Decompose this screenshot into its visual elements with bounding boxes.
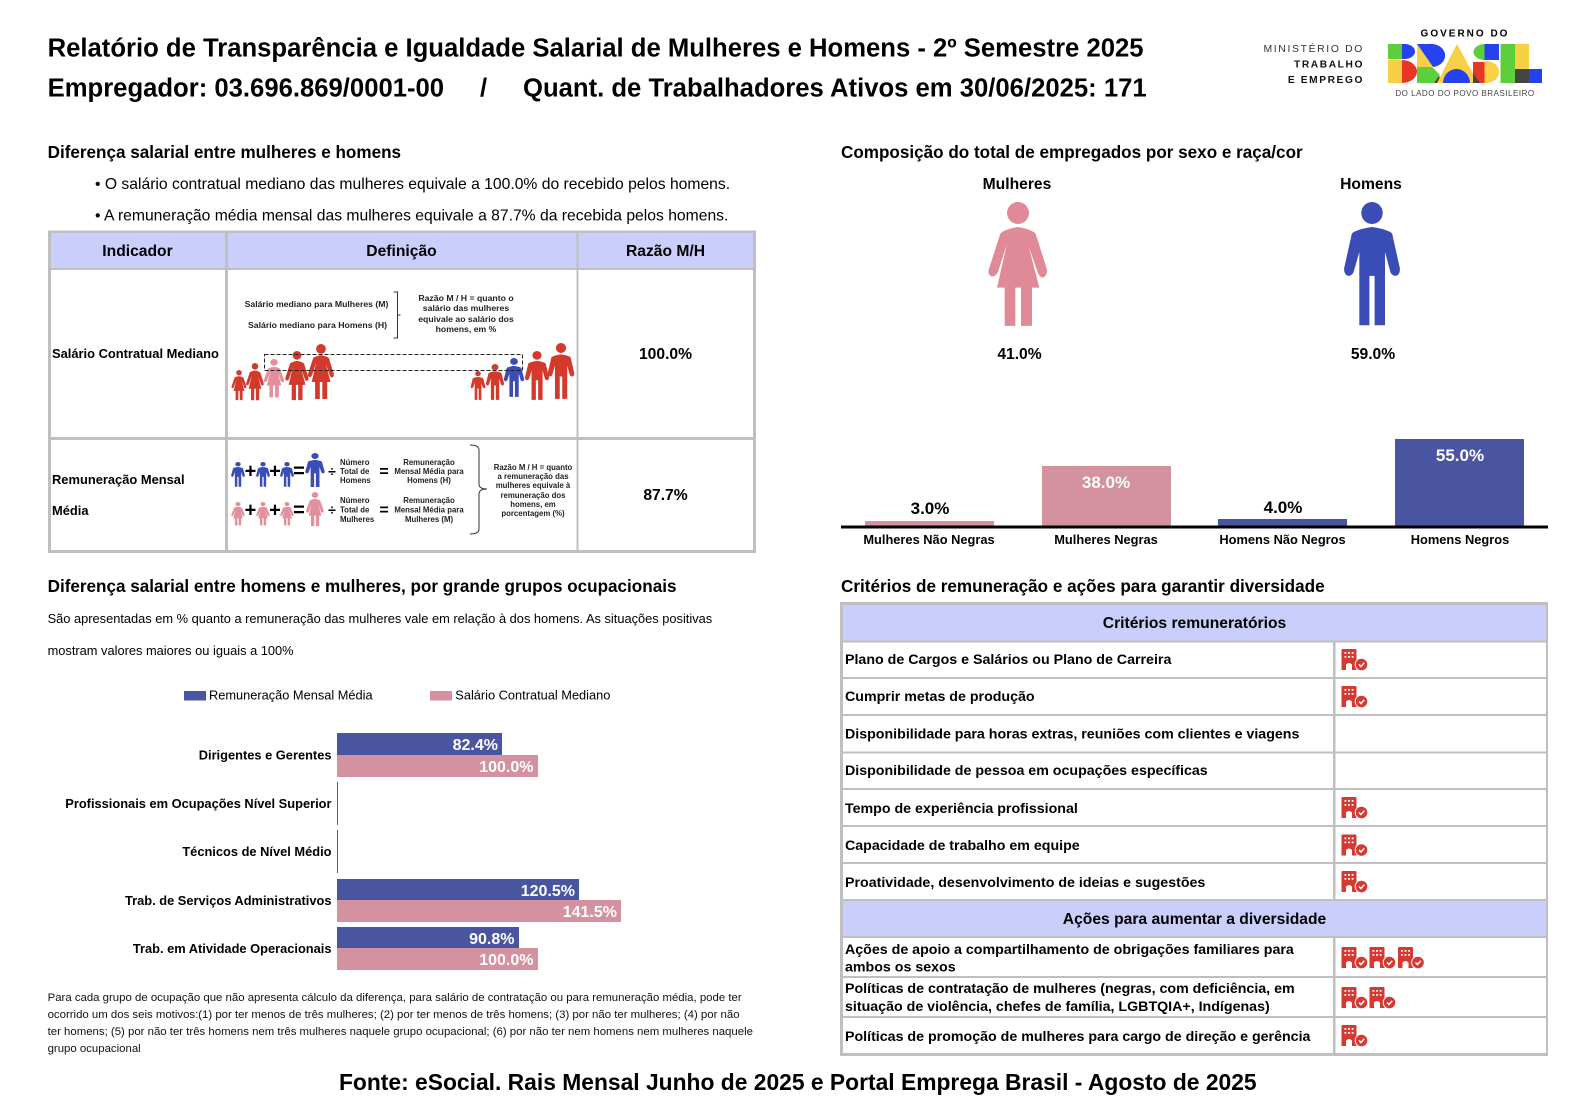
- logo: governo do brasil: GOVERNO DO: [1421, 28, 1509, 40]
- row cells: [843, 642, 1546, 1053]
- diagram: remuneração média definition: Remuneração: [403, 458, 455, 467]
- source note: Fonte: eSocial. Rais Mensal Junho de 2025 e Portal Emprega Brasil - Agosto de 2025: [339, 1069, 1257, 1095]
- logo: ministério do trabalho e emprego: TRABALHO: [1294, 60, 1364, 70]
- criteria labels: Disponibilidade de pessoa em ocupações específicas: [845, 763, 1208, 779]
- icons: company check: [1342, 649, 1425, 1047]
- legend: Salário Contratual Mediano: [455, 687, 610, 702]
- group: serviços administrativos: Trab. de Serviços Administrativos: [125, 893, 332, 908]
- bar chart: composição por raça/cor: 4.0%: [1264, 498, 1302, 517]
- header: ações: [843, 901, 1546, 936]
- action labels: Ações de apoio a compartilhamento de obrigações familiares para: [845, 942, 1294, 958]
- panel: homens: Homens: [1340, 176, 1402, 193]
- panel: mulheres: 41.0%: [997, 346, 1042, 363]
- text block: explanation: São apresentadas em % quanto a remuneração das mulheres vale em relação à dos homens. As situações positivas: [48, 611, 712, 626]
- text block: footnote: grupo ocupacional: [48, 1043, 141, 1055]
- diagram: remuneração média definition: ÷: [328, 463, 336, 479]
- diagram: remuneração média definition: =: [379, 502, 389, 519]
- group: serviços administrativos: 141.5%: [563, 904, 617, 921]
- diagram: salário mediano definition: [231, 292, 574, 400]
- text block: footnote: Para cada grupo de ocupação que não apresenta cálculo da diferença, para salário de contratação ou para remuneração média, pode ter: [48, 992, 742, 1004]
- bar chart: composição por raça/cor: Homens Negros: [1411, 532, 1509, 547]
- diagram: remuneração média definition: homens, em: [510, 500, 556, 509]
- diagram: remuneração média definition: ÷: [328, 502, 336, 518]
- group: serviços administrativos: [125, 879, 621, 922]
- group: atividade operacionais: Trab. em Atividade Operacionais: [133, 941, 332, 956]
- diagram: salário mediano definition: Razão M / H = quanto o: [418, 293, 514, 303]
- action labels: Políticas de promoção de mulheres para cargo de direção e gerência: [845, 1029, 1311, 1045]
- diagram: remuneração média definition: porcentagem (%): [501, 509, 565, 518]
- bar chart: composição por raça/cor: 38.0%: [1082, 473, 1130, 492]
- row: salário contratual mediano: 100.0%: [639, 346, 692, 363]
- group: dirigentes e gerentes: 100.0%: [479, 759, 534, 776]
- diagram: remuneração média definition: =: [293, 500, 305, 522]
- diagram: remuneração média definition: Homens: [340, 476, 371, 485]
- text block: footnote: ocorrido um dos seis motivos:(1) por ter menos de três mulheres; (2) por ter menos de três homens; (3) por não ter mulheres; (4) por não: [48, 1009, 740, 1021]
- heading: composição: Composição do total de empregados por sexo e raça/cor: [841, 143, 1303, 162]
- text block: footnote: [48, 992, 753, 1055]
- icon: man: [1344, 202, 1400, 325]
- group: dirigentes e gerentes: [199, 733, 538, 777]
- criteria labels: Cumprir metas de produção: [845, 689, 1035, 705]
- title: Quant. de Trabalhadores Ativos em 30/06/2025: 171: [523, 74, 1147, 102]
- diagram: salário mediano definition: salário das mulheres: [423, 303, 509, 313]
- action labels: Políticas de contratação de mulheres (negras, com deficiência, em: [845, 981, 1295, 997]
- header: critérios remuneratórios: Critérios remuneratórios: [1103, 615, 1286, 632]
- criteria labels: Tempo de experiência profissional: [845, 801, 1078, 817]
- title: Relatório de Transparência e Igualdade Salarial de Mulheres e Homens - 2º Semestre 2025: [48, 34, 1144, 62]
- text block: salary summary bullets: • A remuneração média mensal das mulheres equivale a 87.7% da recebida pelos homens.: [95, 207, 728, 224]
- diagram: remuneração média definition: [231, 445, 573, 534]
- text block: explanation: [48, 611, 712, 658]
- row: salário contratual mediano: [51, 270, 753, 437]
- heading: critérios: Critérios de remuneração e ações para garantir diversidade: [841, 577, 1325, 596]
- diagram: remuneração média definition: mulheres equivale à: [496, 481, 571, 490]
- panel: mulheres: [983, 176, 1052, 363]
- diagram: remuneração média definition: Número: [340, 458, 370, 467]
- criteria labels: Plano de Cargos e Salários ou Plano de Carreira: [845, 652, 1171, 668]
- text block: explanation: mostram valores maiores ou iguais a 100%: [48, 643, 294, 658]
- heading: diferença salarial entre mulheres e homens: Diferença salarial entre mulheres e homens: [48, 143, 401, 162]
- table header row: Definição: [366, 243, 437, 260]
- bar chart: composição por raça/cor: [841, 439, 1548, 547]
- group: profissionais: Profissionais em Ocupações Nível Superior: [65, 796, 332, 811]
- table header row: Razão M/H: [626, 243, 705, 260]
- diagram: remuneração média definition: Número: [340, 496, 370, 505]
- row: remuneração mensal média: [51, 440, 753, 550]
- row: salário contratual mediano: Salário Contratual Mediano: [52, 346, 219, 361]
- action labels: situação de violência, chefes de família, LGBTQIA+, Indígenas): [845, 999, 1270, 1015]
- diagram: salário mediano definition: equivale ao salário dos: [418, 314, 514, 324]
- icons: women group: [231, 344, 334, 400]
- diagram: remuneração média definition: =: [379, 464, 389, 480]
- group: atividade operacionais: 90.8%: [469, 931, 514, 948]
- bar chart: grupos ocupacionais: [65, 733, 621, 970]
- diagram: salário mediano definition: Salário mediano para Mulheres (M): [245, 299, 389, 309]
- diagram: remuneração média definition: +: [245, 500, 256, 522]
- panel: homens: 59.0%: [1351, 346, 1395, 363]
- group: atividade operacionais: 100.0%: [479, 952, 534, 969]
- heading: grupos ocupacionais: Diferença salarial entre homens e mulheres, por grande grupos ocupacionais: [48, 577, 676, 596]
- criteria labels: Capacidade de trabalho em equipe: [845, 838, 1080, 854]
- diagram: remuneração média definition: Mensal Média para: [394, 467, 464, 476]
- logo: governo do brasil: DO LADO DO POVO BRASILEIRO: [1395, 89, 1535, 98]
- row: remuneração mensal média: Média: [52, 503, 89, 518]
- diagram: remuneração média definition: Total de: [340, 467, 370, 476]
- text block: salary summary bullets: [95, 176, 730, 224]
- group: dirigentes e gerentes: Dirigentes e Gerentes: [199, 747, 332, 762]
- bar chart: composição por raça/cor: 55.0%: [1436, 446, 1484, 465]
- men formula: [231, 453, 325, 487]
- group: atividade operacionais: [133, 927, 538, 970]
- icon: woman: [988, 202, 1047, 326]
- panel: homens: [1340, 176, 1402, 363]
- diagram: remuneração média definition: remuneração dos: [500, 491, 566, 500]
- header: critérios remuneratórios: [843, 605, 1546, 640]
- criteria labels: Proatividade, desenvolvimento de ideias e sugestões: [845, 875, 1205, 891]
- logo: governo do brasil: [1388, 28, 1542, 98]
- diagram: remuneração média definition: Mulheres: [340, 515, 375, 524]
- bar chart: composição por raça/cor: Homens Não Negros: [1219, 532, 1346, 547]
- action labels: ambos os sexos: [845, 959, 956, 975]
- panel: criteria table: [840, 602, 1548, 1056]
- group: serviços administrativos: 120.5%: [521, 883, 575, 900]
- diagram: salário mediano definition: homens, em %: [436, 324, 497, 334]
- diagram: remuneração média definition: +: [269, 500, 281, 522]
- panel: indicator table: [48, 230, 756, 553]
- logo: ministério do trabalho e emprego: [1263, 42, 1364, 86]
- title: /: [480, 74, 487, 102]
- criteria labels: Disponibilidade para horas extras, reuniões com clientes e viagens: [845, 726, 1299, 742]
- bar chart: composição por raça/cor: Mulheres Negras: [1054, 532, 1158, 547]
- icons: men group: [471, 343, 574, 400]
- legend: [184, 687, 610, 702]
- row: remuneração mensal média: Remuneração Mensal: [52, 472, 185, 487]
- diagram: remuneração média definition: Razão M / H = quanto: [494, 463, 573, 472]
- action labels: [845, 942, 1311, 1045]
- diagram: remuneração média definition: =: [293, 460, 305, 482]
- diagram: remuneração média definition: +: [269, 460, 281, 482]
- title: [48, 34, 1147, 102]
- group: dirigentes e gerentes: 82.4%: [453, 737, 498, 754]
- header: ações: Ações para aumentar a diversidade: [1063, 911, 1326, 928]
- panel: mulheres: Mulheres: [983, 176, 1052, 193]
- diagram: remuneração média definition: Homens (H): [407, 476, 451, 485]
- text block: salary summary bullets: • O salário contratual mediano das mulheres equivale a 100.0% do recebido pelos homens.: [95, 176, 730, 193]
- legend: Remuneração Mensal Média: [209, 687, 373, 702]
- criteria labels: [845, 652, 1299, 891]
- logo: ministério do trabalho e emprego: MINISTÉRIO DO: [1263, 42, 1364, 55]
- text block: footnote: ter homens; (5) por não ter três homens nem três mulheres naquele grupo ocupacional; (6) por não ter nem homens nem mulheres naquele: [48, 1026, 753, 1038]
- diagram: remuneração média definition: Mulheres (M): [405, 515, 453, 524]
- logo: ministério do trabalho e emprego: E EMPREGO: [1288, 75, 1364, 86]
- diagram: remuneração média definition: a remuneração das: [497, 472, 569, 481]
- diagram: remuneração média definition: +: [245, 460, 256, 482]
- title: Empregador: 03.696.869/0001-00: [48, 74, 444, 102]
- bar chart: composição por raça/cor: 3.0%: [911, 499, 949, 518]
- diagram: remuneração média definition: Remuneração: [403, 496, 455, 505]
- women formula: [231, 492, 324, 526]
- bar chart: composição por raça/cor: Mulheres Não Negras: [863, 532, 995, 547]
- diagram: remuneração média definition: Mensal Média para: [394, 506, 464, 514]
- table header row: [51, 233, 753, 268]
- row: remuneração mensal média: 87.7%: [643, 487, 688, 504]
- diagram: remuneração média definition: Total de: [340, 506, 370, 514]
- group: técnicos: Técnicos de Nível Médio: [182, 844, 332, 859]
- diagram: salário mediano definition: Salário mediano para Homens (H): [248, 320, 387, 330]
- table header row: Indicador: [102, 243, 173, 260]
